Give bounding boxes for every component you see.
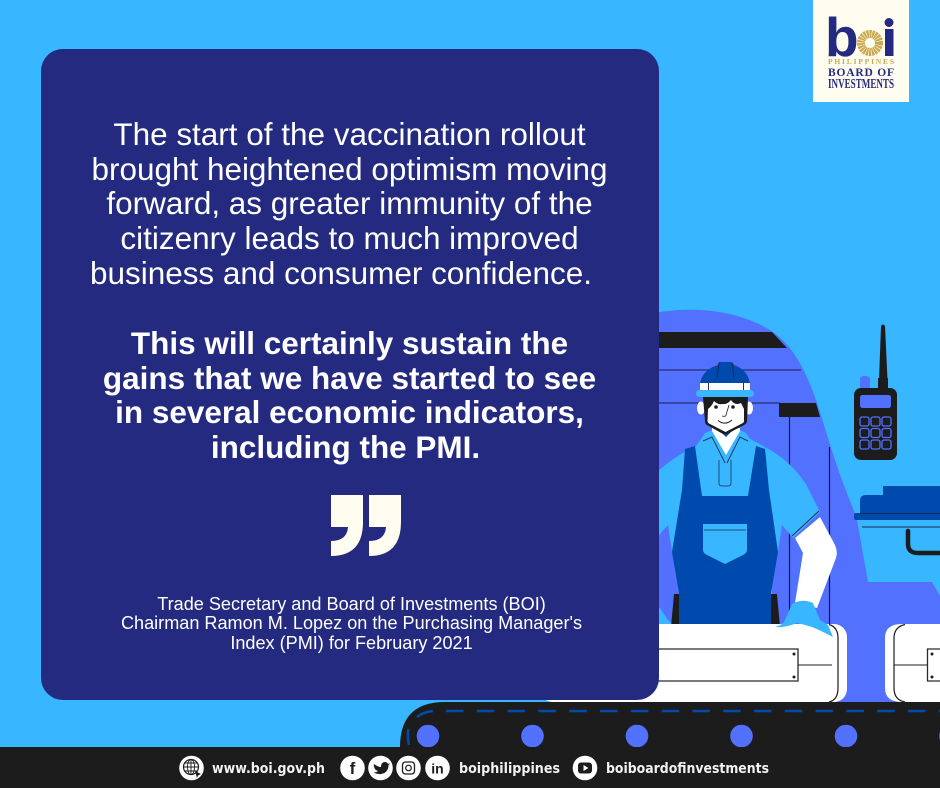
shirt bbox=[640, 436, 820, 594]
emphasised quote text: This will certainly sustain the bbox=[131, 326, 568, 361]
logo: BOI: BOARD OF bbox=[828, 67, 894, 79]
emphasised quote text line 4: including the PMI. bbox=[211, 430, 480, 465]
icon: facebook: f bbox=[350, 759, 356, 778]
attribution bbox=[121, 594, 582, 653]
worker illustration bbox=[640, 362, 837, 629]
conveyor belt bbox=[400, 702, 940, 750]
icon: instagram bbox=[396, 756, 421, 780]
neck bbox=[712, 428, 740, 455]
legs bbox=[671, 594, 780, 627]
attribution: Trade Secretary and Board of Investments (BOI) bbox=[157, 594, 546, 614]
right glove bbox=[775, 601, 833, 637]
panel: quote card bbox=[41, 49, 659, 700]
logo: BOI: INVESTMENTS bbox=[828, 76, 894, 91]
machine at right bbox=[854, 486, 940, 596]
social handle: boiphilippines bbox=[459, 761, 560, 777]
face bbox=[708, 400, 744, 432]
emphasised quote text line 2: gains that we have started to see bbox=[103, 361, 596, 396]
attribution: Index (PMI) for February 2021 bbox=[230, 633, 473, 653]
quote text: The start of the vaccination rollout bbox=[113, 117, 586, 152]
sleeve cuff line bbox=[792, 511, 819, 536]
conveyor boxes bbox=[540, 601, 940, 702]
collar bbox=[697, 430, 754, 461]
icon: linkedin: in bbox=[431, 760, 444, 776]
logo: BOI bbox=[813, 0, 909, 102]
youtube handle: boiboardofinvestments bbox=[606, 761, 769, 777]
quote text line 5: business and consumer confidence. bbox=[90, 256, 592, 291]
icon: facebook bbox=[340, 756, 365, 780]
quote text line 2: brought heightened optimism moving bbox=[91, 152, 608, 187]
attribution: Chairman Ramon M. Lopez on the Purchasing Manager's bbox=[121, 613, 582, 633]
icon: walkie-talkie bbox=[854, 324, 897, 460]
quote text line 3: forward, as greater immunity of the bbox=[106, 186, 593, 221]
logo: BOI: PHILIPPINES bbox=[828, 57, 894, 66]
website: www.boi.gov.ph bbox=[212, 761, 325, 777]
overalls bbox=[672, 446, 778, 627]
footer bar bbox=[0, 747, 940, 788]
quote text line 4: citizenry leads to much improved bbox=[120, 221, 579, 256]
icon: youtube bbox=[573, 756, 597, 780]
left glove bbox=[640, 600, 676, 629]
hair and head outline bbox=[703, 397, 748, 434]
helmet bbox=[700, 362, 750, 384]
icon: globe bbox=[179, 756, 204, 780]
factory background bbox=[640, 310, 940, 702]
icon: twitter bbox=[368, 756, 393, 780]
logo: BOI: b bbox=[825, 6, 859, 68]
ears bbox=[697, 402, 705, 414]
icon: linkedin bbox=[425, 756, 450, 780]
icon: closing quotation mark bbox=[331, 495, 401, 556]
pocket bbox=[703, 524, 747, 564]
emphasised quote text line 3: in several economic indicators, bbox=[115, 395, 584, 430]
white forearm bbox=[795, 517, 837, 608]
